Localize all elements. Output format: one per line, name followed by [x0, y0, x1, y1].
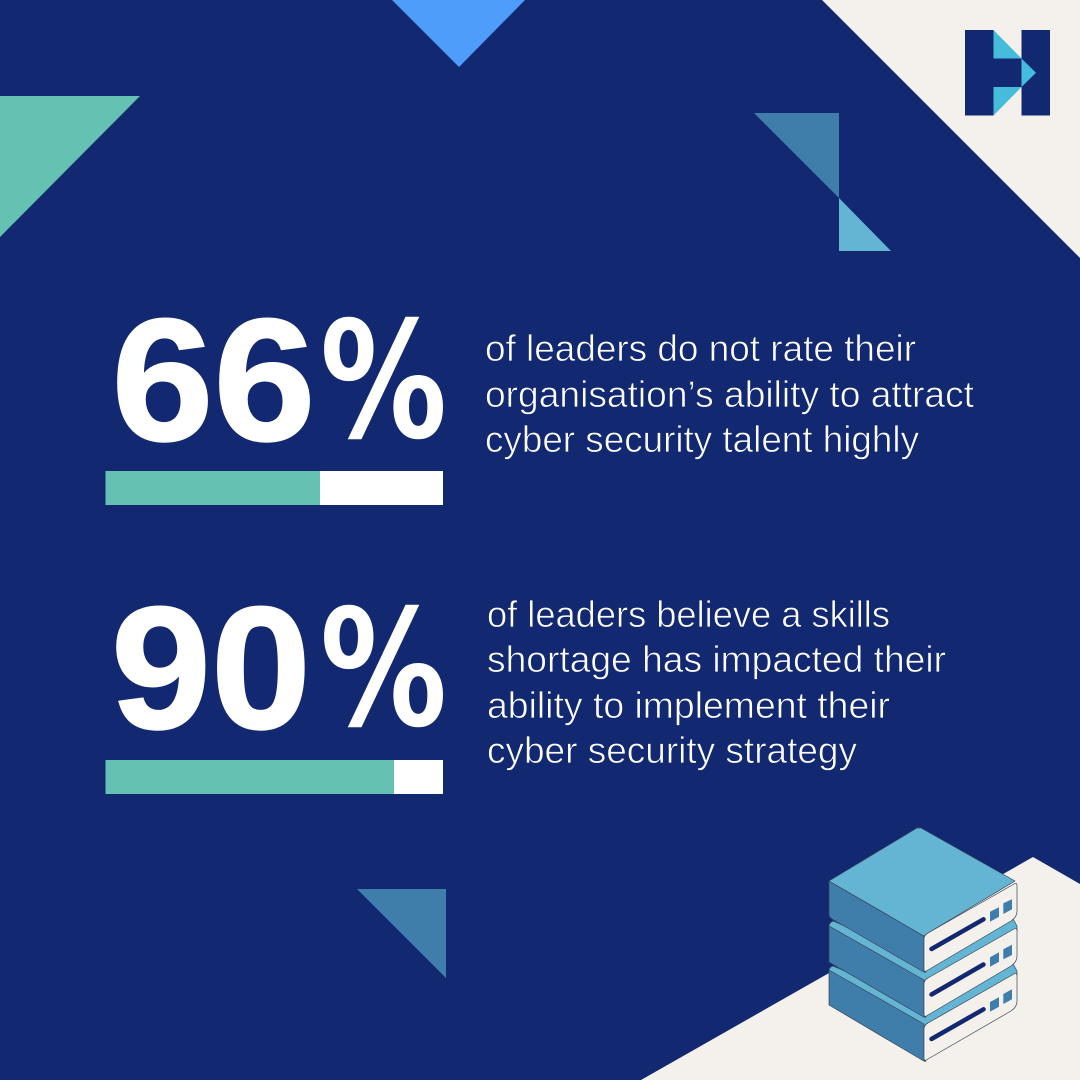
- decorative triangle: left green: [0, 96, 140, 237]
- number: 90%: [111, 570, 447, 765]
- text: first statement: organisation’s ability to attract: [485, 374, 975, 415]
- progress bar: 66 percent: [106, 471, 443, 505]
- text: second statement: of leaders believe a skills: [487, 594, 890, 635]
- progress bar: 90 percent: [106, 760, 443, 794]
- decorative triangle: bottom centre: [357, 889, 446, 978]
- number: 90%: 90: [111, 570, 311, 765]
- stat: 90 percent: [106, 570, 946, 794]
- text: second statement: [487, 594, 946, 771]
- server unit: top: [829, 828, 1017, 972]
- text: second statement: ability to implement their: [487, 685, 890, 726]
- logo: [965, 30, 1050, 116]
- text: first statement: of leaders do not rate their: [485, 328, 916, 369]
- server unit: middle: [829, 915, 1017, 1017]
- text: first statement: cyber security talent highly: [485, 419, 919, 460]
- number: 66%: 66: [112, 282, 316, 477]
- cream corner: top right: [822, 0, 1080, 258]
- stat: 66 percent: [106, 282, 975, 505]
- decorative triangles: upper right pair: [754, 113, 891, 251]
- icon: server stack: [829, 828, 1017, 1061]
- cream corner: bottom right: [641, 857, 1080, 1080]
- server unit: bottom: [829, 960, 1017, 1061]
- text: second statement: shortage has impacted their: [487, 639, 946, 680]
- decorative triangle: top blue: [392, 0, 525, 67]
- number: 66%: [112, 282, 447, 477]
- number: 66%: %: [320, 288, 447, 476]
- text: second statement: cyber security strategy: [487, 730, 857, 771]
- number: 90%: %: [320, 576, 447, 764]
- text: first statement: [485, 328, 975, 460]
